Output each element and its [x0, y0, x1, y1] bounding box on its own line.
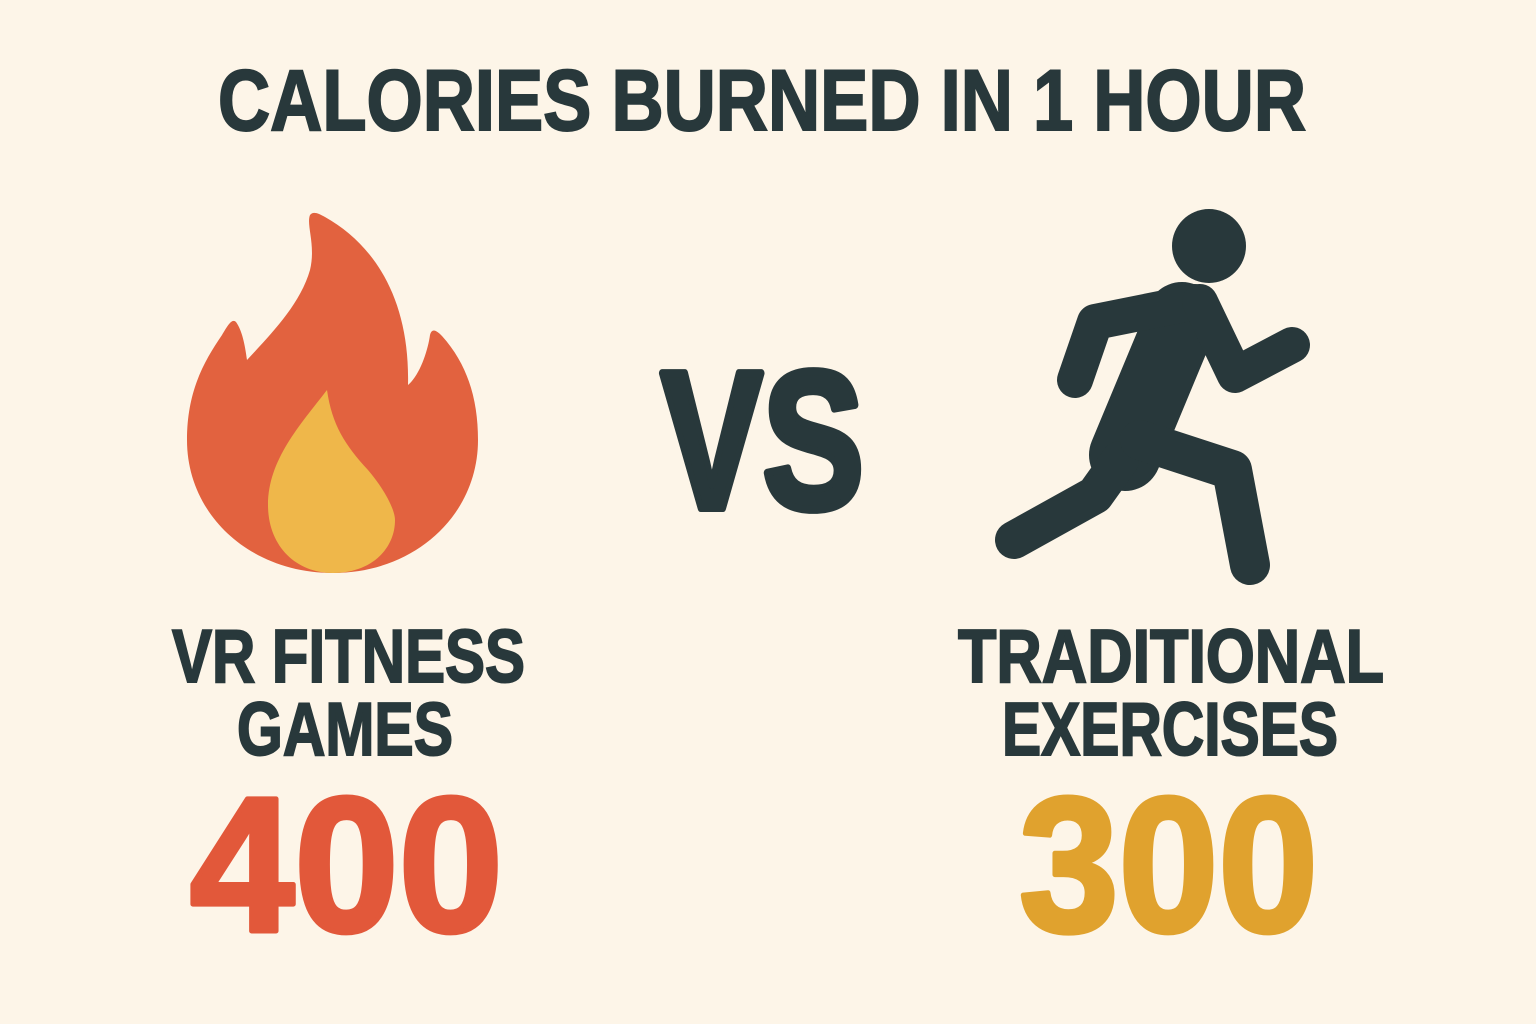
icon: runner [1014, 209, 1292, 565]
value: 300: 300 [1019, 757, 1318, 972]
label: traditional exercises: EXERCISES [1002, 687, 1338, 771]
panel: traditional exercises [958, 614, 1384, 972]
panel: VR fitness [172, 614, 525, 972]
label: VR fitness games: GAMES [237, 687, 453, 771]
vs label: VS [661, 331, 864, 550]
title: CALORIES BURNED IN 1 HOUR [218, 53, 1306, 149]
value: 400: 400 [190, 757, 503, 972]
icon: flame [187, 213, 478, 573]
label: VR fitness games: VR FITNESS [172, 614, 525, 698]
label: traditional exercises [958, 614, 1384, 771]
label: VR fitness games [172, 614, 525, 771]
label: traditional exercises: TRADITIONAL [958, 614, 1384, 698]
